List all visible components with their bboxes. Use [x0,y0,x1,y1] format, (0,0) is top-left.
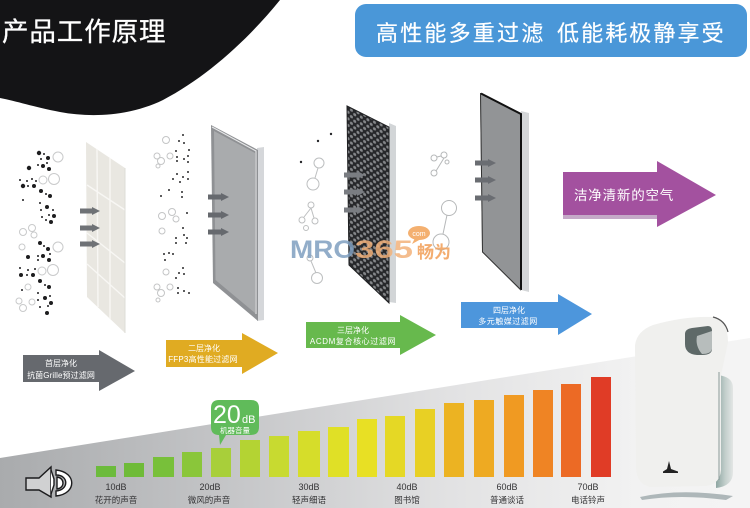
particles before third filter [299,133,332,284]
arrow label: fourth stage [461,294,592,335]
particles before fourth filter [431,152,456,250]
slogan banner: 高性能多重过滤 [376,21,545,46]
watermark: MRO365: 畅为 [417,243,451,262]
arrows through filter 4 [475,159,496,202]
watermark: MRO365 [290,226,451,264]
bar labels: 普通谈话 [490,495,524,505]
bar labels: 10dB [105,482,127,492]
callout: 20dB machine noise: 机器音量 [220,425,250,435]
arrow label: fourth stage: 四层净化 [493,305,525,315]
bar labels: 轻声细语 [292,495,326,505]
bar labels: 花开的声音 [95,495,138,505]
callout: 20dB machine noise [211,400,259,445]
filter 1: pre-filter grille [86,142,125,333]
arrow label: third stage: ACDM复合核心过滤网 [310,336,396,346]
callout: 20dB machine noise: 20 [213,401,241,429]
slogan banner: 低能耗极静享受 [557,21,726,46]
bar labels: 图书馆 [394,495,420,505]
arrow label: first stage: 抗菌Grille预过滤网 [27,370,95,380]
filter 3: ACDM composite mesh [347,106,396,303]
watermark: MRO365: MRO [290,236,355,264]
ground gradient band [0,338,750,508]
title banner: black corner shape [0,0,280,115]
bar labels: 微风的声音 [188,495,231,505]
arrow label: third stage: 三层净化 [337,325,369,335]
air purifier product [635,317,733,500]
arrow: clean fresh air: 洁净清新的空气 [574,188,674,203]
watermark: MRO365: 365 [355,236,413,264]
icon: speaker [26,467,72,497]
arrows through filter 2 [208,193,229,236]
watermark: MRO365: com [412,231,426,238]
noise level bar chart [96,377,611,477]
arrows through filter 1 [80,207,100,248]
arrow label: first stage: 首层净化 [45,358,77,368]
bar labels [95,482,605,505]
arrow label: third stage [306,315,436,355]
arrow label: second stage [166,333,278,374]
arrows through filter 3 [344,171,365,214]
particles before second filter [154,134,190,302]
arrow label: second stage: 二层净化 [188,343,220,353]
arrow label: second stage: FFP3高性能过滤网 [168,354,238,364]
bar labels: 40dB [396,482,418,492]
filter 2: FFP3 HEPA [211,125,264,321]
title: 产品工作原理 [2,17,166,47]
bar labels: 70dB [577,482,599,492]
particles before first filter [16,151,63,315]
bar labels: 60dB [496,482,518,492]
arrow: clean fresh air [563,161,716,227]
arrow label: first stage [23,350,135,391]
filter 4: catalyst [480,93,529,292]
arrow label: fourth stage: 多元触媒过滤网 [478,316,538,326]
bar labels: 电话铃声 [571,495,605,505]
slogan banner [355,4,747,57]
bar labels: 20dB [199,482,221,492]
callout: 20dB machine noise: dB [242,414,255,426]
bar labels: 30dB [298,482,320,492]
